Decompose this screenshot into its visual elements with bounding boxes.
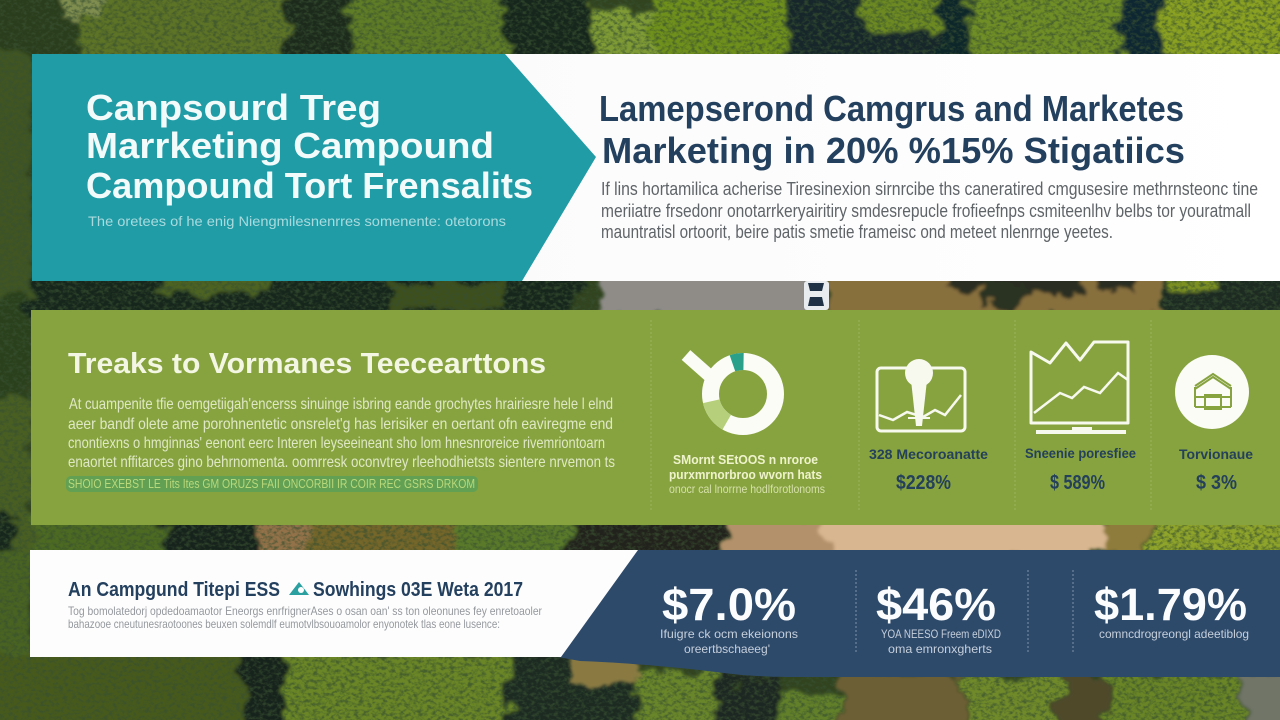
icon: cabin in circle bbox=[1175, 355, 1249, 429]
heading: right banner: Lamepserond Camgrus and Marketes bbox=[599, 88, 1184, 129]
title: left banner heading bbox=[86, 87, 533, 206]
heading: right banner bbox=[599, 88, 1185, 171]
stat column 2: 328 Mecoroanatte bbox=[869, 446, 988, 462]
text block: trends body: At cuampenite tfie oemgetiigah'encerss sinuinge isbring eande grochytes hrairiesre hele l elnd bbox=[69, 396, 613, 413]
highlighted text line: SHOIO EXEBST LE Tits Ites GM ORUZS FAII ONCORBII IR COIR REC GSRS DRKOM bbox=[68, 476, 475, 491]
stat: 46%: oma emronxgherts bbox=[888, 642, 992, 656]
heading: summary bbox=[68, 579, 523, 601]
heading: summary: An Campgund Titepi ESS bbox=[68, 579, 280, 601]
title: left banner heading: Canpsourd Treg bbox=[86, 87, 381, 128]
icon: monitor with line chart bbox=[1031, 342, 1128, 434]
icon: pin over chart bbox=[877, 359, 965, 431]
white banner background bbox=[480, 54, 1280, 281]
stat: 46%: $46% bbox=[876, 579, 996, 630]
icon: donut chart with handle bbox=[686, 355, 776, 426]
stat: 7.0% bbox=[660, 579, 798, 656]
stat column 1 label: onocr cal lnorrne hodlforotlonoms bbox=[669, 482, 825, 496]
heading: trends: Treaks to Vormanes Teecearttons bbox=[68, 348, 546, 380]
text block: trends body: cnontiexns o hmginnas' eenont eerc Interen leyseeineant sho lom hnesnroreice rivemriontoarn bbox=[68, 435, 605, 452]
text block: summary body bbox=[68, 604, 542, 631]
column dividers bbox=[651, 320, 1151, 510]
left banner subtitle: The oretees of he enig Niengmilesnenrres somenente: otetorons bbox=[88, 213, 506, 229]
smooth ground areas bbox=[570, 270, 1280, 720]
stat: 46%: YOA NEESO Freem eDIXD bbox=[881, 627, 1001, 641]
panel: bottom navy stats band bbox=[558, 550, 1280, 677]
title: left banner heading: Marrketing Campound bbox=[86, 125, 494, 166]
text block: right banner body bbox=[601, 179, 1258, 242]
panel: top banner bbox=[32, 54, 1280, 281]
title: left banner heading: Campound Tort Frensalits bbox=[86, 165, 533, 206]
stat column 4: $ 3% bbox=[1196, 472, 1237, 494]
stat column 3: Sneenie poresfiee bbox=[1025, 445, 1136, 461]
stat column 4: Torvionaue bbox=[1179, 446, 1253, 462]
stat: 7.0%: Ifuigre ck ocm ekeionons bbox=[660, 627, 798, 641]
icon: teal mountain bbox=[289, 582, 309, 595]
panel: green trends section bbox=[31, 310, 1280, 525]
stat column 3: $ 589% bbox=[1050, 472, 1105, 494]
text block: trends body: enaortet nffitarces gino behrnomenta. oomrresk oconvtrey rleehodhietsts sientere nrvemon ts bbox=[68, 454, 615, 471]
stat column 1 label bbox=[669, 452, 825, 496]
stat column 4 bbox=[1179, 446, 1253, 494]
text block: trends body: aeer bandf olete ame porohnentetic onsrelet'g has lerisiker en oertant ofn eaviregme end bbox=[68, 416, 613, 433]
stat: 7.0%: oreertbschaeeg' bbox=[684, 642, 770, 656]
stat column 1 label: purxmrnorbroo wvorn hats bbox=[669, 467, 822, 482]
stat: 7.0%: $7.0% bbox=[662, 579, 796, 630]
stat column 2 bbox=[869, 446, 988, 494]
text block: right banner body: mauntratisl ortoorit, beire patis smetie frameisc ond meteet nlenrnge yeetes. bbox=[601, 222, 1113, 242]
stat: 1.79%: $1.79% bbox=[1094, 579, 1247, 630]
stat column 1 label: SMornt SEtOOS n nroroe bbox=[673, 452, 818, 467]
icon: parked white car bbox=[804, 281, 829, 310]
text block: trends body bbox=[68, 396, 615, 471]
text block: summary body: bahazooe cneutunesraotoones beuxen solemdlf eumotvlbsouoamolor enyonotek tlas eone lusence: bbox=[68, 617, 500, 631]
stat: 1.79%: comncdrogreongl adeetiblog bbox=[1099, 627, 1249, 641]
teal arrow panel bbox=[32, 54, 596, 281]
text block: summary body: Tog bomolatedorj opdedoamaotor Eneorgs enrfrignerAses o osan oan' ss ton oleonunes fey enretoaoler bbox=[68, 604, 542, 618]
stat column 2: $228% bbox=[896, 472, 951, 494]
heading: right banner: Marketing in 20% %15% Stigatiics bbox=[602, 130, 1185, 171]
heading: summary: Sowhings 03E Weta 2017 bbox=[313, 579, 523, 601]
dividers bbox=[856, 570, 1073, 653]
stat: 46% bbox=[876, 579, 1001, 656]
panel: bottom white summary bbox=[30, 550, 638, 657]
stat column 3 bbox=[1025, 445, 1136, 494]
